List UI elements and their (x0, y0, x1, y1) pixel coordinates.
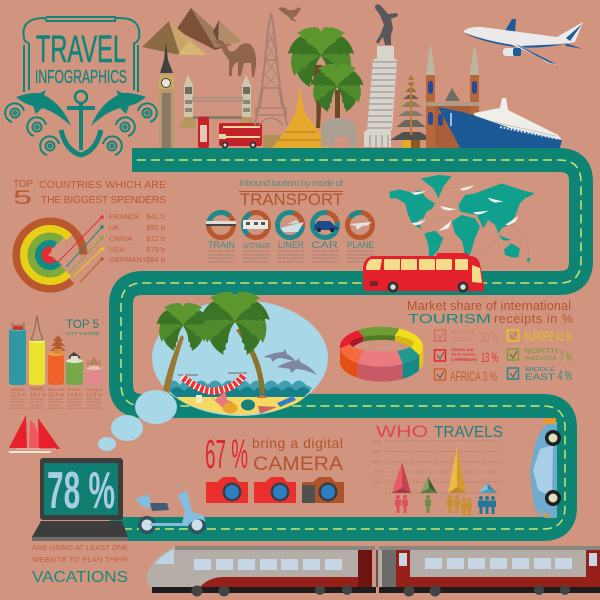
tower bridge (179, 75, 255, 128)
icon: plane (349, 222, 372, 230)
small transport text: adipiscing sed do tem (243, 256, 271, 260)
discobolus statue (375, 4, 398, 45)
scooter (135, 482, 206, 534)
tower (364, 46, 397, 147)
transport labels: LINER (278, 240, 304, 250)
city labels: PARIS (30, 387, 45, 393)
panel: market share: receipts in % (494, 312, 573, 326)
rails (152, 587, 376, 593)
small transport text: adipiscing sed do tem (347, 256, 375, 260)
map planes (411, 185, 518, 231)
flight paths (418, 188, 529, 260)
country list: USA (109, 245, 124, 254)
africa: AFRICA 3 % (450, 368, 497, 384)
city landmarks (12, 316, 100, 368)
small transport text: por incididunt ut lab (278, 260, 303, 264)
asia and pacific: ASIA and (451, 330, 474, 336)
camel (213, 40, 256, 77)
transport labels (208, 240, 374, 250)
central and south america: SOUTH AMERICA (451, 352, 477, 356)
city labels: 12.9 m (86, 392, 103, 398)
title badge: INFOGRAPHICS (35, 66, 127, 87)
cruise ship (438, 98, 562, 148)
small transport text: adipiscing sed do tem (312, 256, 340, 260)
city labels: ISTANBUL (86, 388, 103, 392)
icon: car (314, 221, 338, 232)
transport labels: AUTOTRAILER (243, 243, 270, 250)
heading: Inbound tourism by mode of (239, 178, 343, 189)
city labels: consectetur (48, 403, 62, 407)
cylinder chart (9, 327, 102, 385)
panel: who travels: 30 % (373, 460, 381, 464)
city labels: adipiscing elit (10, 406, 26, 410)
city labels: Lorem ipsum (10, 397, 25, 401)
city labels: Lorem ipsum (48, 397, 63, 401)
city labels: dolor sit amet (29, 400, 45, 404)
transport labels: PLANE (347, 240, 374, 250)
city labels: consectetur (10, 403, 24, 407)
city labels: dolor sit amet (48, 400, 64, 404)
3D ring chart (340, 327, 423, 382)
leaning tower with discobolus (364, 4, 398, 147)
check list (434, 328, 572, 384)
small transport text: adipiscing sed do tem (208, 256, 236, 260)
panel: transport (206, 178, 377, 264)
people icons (395, 495, 496, 516)
pyramids (142, 8, 242, 55)
train (146, 546, 600, 596)
double decker bus (219, 123, 262, 148)
airplane (463, 19, 583, 65)
middle east: MIDDLE (525, 367, 555, 373)
country list: $79 b (146, 245, 165, 254)
blue car (530, 418, 561, 518)
country list: FRANCE (109, 212, 140, 221)
panel: market share (340, 299, 573, 384)
beach scene (98, 289, 328, 451)
city labels: LONDON (10, 388, 25, 392)
camera text: bring a digital (252, 435, 343, 451)
heading: Market share of international (407, 299, 571, 313)
small transport text: por incididunt ut lab (243, 260, 268, 264)
small transport text: Lorem ipsum dolor sit (243, 249, 270, 253)
panel: who travels (373, 422, 503, 516)
country list: $41 b (146, 212, 165, 221)
red tour bus (363, 253, 484, 292)
panel: camera stat: 67 % (205, 431, 248, 477)
panel: laptop stat (32, 458, 128, 586)
78 percent: 78 % (47, 462, 115, 520)
city labels: dolor sit amet (10, 400, 26, 404)
leader lines (58, 215, 104, 282)
small transport text: amet consectetur elit (278, 252, 304, 256)
pyramid chart (392, 447, 497, 493)
heading: TOP 5 (66, 319, 99, 331)
small transport text: Lorem ipsum dolor sit (278, 249, 305, 253)
shells and starfish (196, 391, 296, 414)
middle east: EAST (525, 372, 556, 382)
central and south america: CENTRAL AND (451, 348, 475, 352)
small transport text (208, 249, 375, 264)
city labels: Lorem ipsum (86, 397, 101, 401)
axis and grid (386, 441, 500, 493)
laptop base (32, 521, 128, 537)
panel: market share: TOURISM (408, 311, 491, 326)
thought bubble (98, 390, 177, 451)
central and south america (434, 348, 498, 365)
stat text: ARE USING AT LEAST ONE (32, 543, 128, 552)
panel: camera stat (205, 431, 344, 503)
city labels: adipiscing elit (48, 406, 64, 410)
stupa (263, 86, 328, 148)
second car (379, 546, 600, 587)
panel: top 5 cities: CITY VISITED (66, 331, 100, 337)
country list: $72 b (146, 234, 165, 243)
north america: NORTH (524, 348, 558, 355)
country list: $84 b (146, 255, 165, 264)
anchor (61, 91, 101, 155)
palm left (163, 335, 184, 393)
city labels: adipiscing elit (86, 406, 102, 410)
heading: TOP (13, 179, 33, 190)
small transport text: por incididunt ut lab (208, 260, 233, 264)
small transport text: amet consectetur elit (347, 252, 373, 256)
road (110, 160, 581, 529)
sea (167, 380, 312, 398)
elephant (321, 118, 357, 147)
cameras (206, 477, 248, 503)
city labels: adipiscing elit (67, 406, 83, 410)
asia and pacific: PACIFIC (451, 337, 472, 343)
city labels: dolor sit amet (67, 400, 83, 404)
dolphins (16, 90, 146, 126)
pagoda (390, 75, 434, 148)
city labels: Lorem ipsum (29, 397, 44, 401)
small transport text: Lorem ipsum dolor sit (208, 249, 235, 253)
sailboat (8, 415, 60, 453)
phone box (198, 117, 209, 148)
panel: who travels: TRAVELS (434, 424, 503, 441)
north america (508, 348, 572, 364)
city labels: consectetur (86, 403, 100, 407)
asia and pacific (434, 329, 498, 345)
small transport text: por incididunt ut lab (312, 260, 337, 264)
city labels: consectetur (29, 403, 43, 407)
panel: top 5 spenders: 5 (13, 188, 32, 209)
hammock (178, 373, 247, 391)
city labels (10, 387, 103, 410)
title badge (5, 17, 157, 155)
asia and pacific: 30 % (481, 329, 498, 345)
panel: top 5 spenders: COUNTRIES WHICH ARE (39, 179, 166, 191)
bogies (192, 585, 570, 596)
city labels: BEIJING (67, 388, 81, 392)
middle east: 4 % (558, 367, 572, 383)
icon: train (206, 221, 236, 226)
small transport text: por incididunt ut lab (347, 260, 372, 264)
world map (389, 175, 535, 263)
small transport text: amet consectetur elit (208, 252, 234, 256)
small transport text: Lorem ipsum dolor sit (347, 249, 374, 253)
middle east (508, 367, 572, 383)
transport labels: TRAIN (208, 240, 235, 250)
eiffel tower (255, 13, 287, 125)
country list: CHINA (109, 234, 132, 243)
city labels: consectetur (67, 403, 81, 407)
country list: GERMANY (109, 255, 147, 264)
city labels: BANGKOK (48, 388, 66, 392)
city labels: 14.8 m (67, 392, 84, 398)
north america: AMERICA (525, 356, 557, 362)
small transport text: amet consectetur elit (312, 252, 338, 256)
panel: who travels: 10 % (373, 481, 381, 485)
icon: autotrailer (243, 220, 268, 229)
panel: who travels: 40 % (373, 450, 381, 454)
sand (176, 397, 305, 415)
kangaroo (278, 7, 301, 22)
city labels: 18.5 m (30, 392, 47, 398)
panel: top 5 spenders (3, 179, 166, 302)
heading: WHO (376, 422, 428, 441)
small transport text: amet consectetur elit (243, 252, 269, 256)
small transport text: adipiscing sed do tem (278, 256, 306, 260)
city labels: Lorem ipsum (67, 397, 82, 401)
city labels: dolor sit amet (86, 400, 102, 404)
panel: market share: 7 % (560, 348, 572, 364)
icon: liner (280, 220, 304, 232)
laptop screen (40, 458, 123, 520)
city labels: 22.3 m (10, 392, 27, 398)
small transport text: Lorem ipsum dolor sit (312, 249, 339, 253)
city labels: 16.4 m (48, 392, 65, 398)
central and south america: 13 % (481, 349, 498, 365)
big ben (159, 42, 174, 148)
panel: top 5 spenders: THE BIGGEST SPENDERS (41, 194, 166, 206)
transport labels: CAR (311, 240, 339, 250)
dolphins (263, 349, 317, 375)
radial chart (3, 208, 97, 302)
panel: laptop stat: VACATIONS (32, 569, 128, 586)
panel: who travels: 50 % (373, 440, 381, 444)
country list: UK (109, 223, 119, 232)
country list: $50 b (146, 223, 165, 232)
central and south america: CARRIBEAN (451, 357, 477, 362)
badge frame (23, 17, 139, 92)
transport rings (207, 207, 377, 243)
panel: camera stat: CAMERA (253, 454, 343, 475)
panel: who travels: 20 % (373, 470, 381, 474)
panel: transport: TRANSPORT (240, 190, 343, 209)
church (425, 43, 480, 148)
panel: top 5 cities (9, 316, 103, 410)
sky (152, 300, 328, 416)
panel: laptop stat: WEBSITE TO PLAN THEIR (32, 555, 128, 564)
palm right (236, 328, 265, 394)
city labels: adipiscing elit (29, 406, 45, 410)
swirls (5, 103, 157, 155)
palm trees (286, 24, 365, 128)
front car (146, 546, 358, 587)
title text: TRAVEL (36, 29, 126, 71)
country list (109, 212, 165, 264)
